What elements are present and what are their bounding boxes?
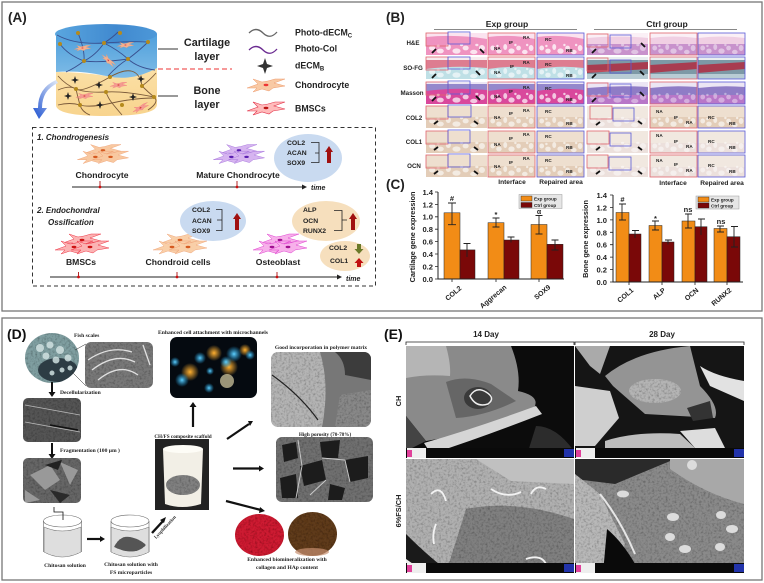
group headers: Exp group: [486, 19, 528, 29]
chart: bone gene expression: 1.0: [596, 216, 607, 225]
legend: C: [348, 34, 353, 40]
chart: cartilage gene expression: 1.4: [422, 188, 434, 197]
heading D: (D): [7, 326, 26, 342]
arrow heads: [248, 421, 265, 513]
column captions: [498, 179, 744, 187]
chart: cartilage gene expression: 0.8: [422, 225, 433, 234]
region labels: IF: [509, 40, 513, 45]
chart: bone gene expression: 0.6: [596, 241, 607, 250]
microparticle beaker: Chitosan solution with: [104, 562, 159, 568]
region labels: RB: [566, 145, 573, 150]
biomineralization photos: [235, 512, 337, 556]
tile borders: [426, 32, 745, 177]
scaffold label: CH/FS composite scaffold: [154, 434, 212, 440]
region labels: NA: [656, 158, 663, 163]
panel: bottom frame: [2, 318, 762, 580]
microparticle beaker: FS microparticles: [110, 570, 153, 576]
region labels: RB: [729, 145, 736, 150]
row labels: 6%FS/CH: [394, 495, 403, 527]
region labels: IF: [509, 111, 513, 116]
legend: BMSCs: [295, 104, 326, 114]
microparticle beaker: [104, 515, 159, 576]
porosity SEM: [276, 437, 373, 502]
region labels: RC: [545, 86, 552, 91]
column captions: Repaired area: [700, 180, 744, 187]
stain row labels: COL2: [406, 115, 423, 122]
region labels: RA: [523, 108, 530, 113]
SEM CH 14 day: [406, 346, 574, 458]
stain row labels: H&E: [406, 40, 420, 47]
region labels: RB: [566, 97, 573, 102]
fish scales photo: [25, 333, 80, 383]
region labels: RA: [523, 85, 530, 90]
cell attachment label: Enhanced cell attachment with microchannels: [158, 330, 269, 336]
chitosan beaker: [44, 507, 87, 569]
chart: bone gene expression: Bone gene expression: [581, 200, 590, 278]
chart: bone gene expression: 1.4: [596, 191, 608, 200]
chart: cartilage gene expression: #: [450, 194, 455, 203]
region labels: IF: [510, 64, 514, 69]
biomineralization label: collagen and HAp content: [256, 565, 318, 571]
endochondral ossification section: Chondroid cells: [146, 257, 211, 267]
region labels: RC: [545, 109, 552, 114]
chart: bone gene expression: Ctrl group: [711, 204, 733, 208]
region labels: NA: [494, 164, 501, 169]
chondrogenesis section: SOX9: [287, 160, 305, 167]
polymer matrix SEM: [271, 352, 371, 427]
chart: bone gene expression: ALP: [652, 287, 668, 302]
chart: bone gene expression: 0.8: [596, 228, 607, 237]
lyophilization arrow: Lyophilization: [154, 515, 178, 540]
chart: cartilage gene expression: 0.0: [422, 275, 433, 284]
region labels: RC: [708, 115, 715, 120]
region labels: IF: [674, 115, 678, 120]
chart: cartilage gene expression: Exp group: [534, 196, 557, 202]
legend: [247, 28, 353, 115]
panel B: histology: [386, 10, 745, 187]
legend: dECM: [295, 60, 320, 70]
column captions: Interface: [498, 179, 526, 186]
column captions: Interface: [659, 180, 687, 187]
scaffold photo: [155, 439, 209, 510]
SEM 6%FS/CH 28 day: [575, 459, 744, 573]
layer labels: [184, 37, 230, 111]
histology tiles: [426, 33, 745, 177]
region labels: NA: [494, 70, 501, 75]
chart: bone gene expression: Exp group: [711, 198, 734, 202]
chondrogenesis section: [37, 133, 342, 192]
chart: bone gene expression: [581, 191, 743, 308]
chart: cartilage gene expression: Cartilage gene expression: [408, 192, 417, 282]
stain row labels: SO-FG: [403, 65, 423, 72]
chart: bone gene expression: #: [620, 195, 625, 204]
endochondral ossification section: [36, 201, 370, 283]
endochondral ossification section: COL2: [329, 245, 347, 252]
chart: cartilage gene expression: SOX9: [533, 284, 552, 302]
region labels: IF: [674, 162, 678, 167]
region labels: NA: [494, 46, 501, 51]
region labels: RA: [523, 132, 530, 137]
heading B: (B): [386, 10, 405, 25]
decellularization step: [48, 382, 102, 397]
region labels: RC: [545, 37, 552, 42]
layer leader lines: [158, 49, 232, 96]
endochondral ossification section: COL2: [192, 207, 210, 214]
heading C: (C): [386, 177, 405, 192]
endochondral ossification section: Ossification: [48, 218, 94, 227]
stain row labels: [400, 40, 424, 170]
chart: cartilage gene expression: COL2: [444, 285, 463, 303]
region labels: RC: [708, 139, 715, 144]
connector lines: [72, 344, 86, 386]
arrow to microparticles: [87, 538, 101, 540]
porosity label: High porosity (70-78%): [299, 431, 351, 438]
column captions: Repaired area: [539, 179, 583, 186]
region labels: RA: [523, 156, 530, 161]
chart: cartilage gene expression: 0.4: [422, 250, 434, 259]
time labels: 28 Day: [649, 330, 675, 339]
region labels: IF: [509, 89, 513, 94]
brackets: [406, 342, 744, 345]
chart: cartilage gene expression: Aggrecan: [479, 284, 508, 310]
chart: cartilage gene expression: 0.2: [422, 262, 433, 271]
chart: bone gene expression: COL1: [616, 287, 635, 305]
region labels: RC: [708, 163, 715, 168]
legend: B: [320, 66, 325, 72]
region labels: RB: [566, 121, 573, 126]
heading A: (A): [8, 10, 27, 25]
stain row labels: Masson: [400, 90, 424, 97]
endochondral ossification section: COL1: [330, 258, 348, 265]
chondrogenesis section: Mature Chondrocyte: [196, 170, 280, 180]
overview tile arrows: [432, 43, 645, 174]
arrows from scaffold: [226, 424, 261, 510]
chart: bone gene expression: 1.2: [596, 203, 607, 212]
region labels: RC: [545, 158, 552, 163]
region labels: RA: [686, 144, 693, 149]
chart: bone gene expression: *: [654, 214, 657, 223]
region labels: IF: [509, 160, 513, 165]
region labels: NA: [656, 133, 663, 138]
chart: cartilage gene expression: 1.0: [422, 213, 433, 222]
arrow: zoom into layers: [33, 80, 58, 119]
stain row labels: COL1: [406, 139, 423, 146]
heading E: (E): [384, 326, 403, 342]
decellularized SEM: [23, 398, 81, 442]
region labels: NA: [656, 109, 663, 114]
region labels: RA: [523, 60, 530, 65]
chart: bone gene expression: ns: [684, 205, 692, 214]
chart: cartilage gene expression: 0.6: [422, 238, 433, 246]
endochondral ossification section: 2. Endochondral: [36, 206, 100, 215]
region labels: NA: [494, 142, 501, 147]
endochondral ossification section: OCN: [303, 218, 318, 225]
fragmentation step: [48, 443, 120, 459]
polymer matrix label: Good incorporation in polymer matrix: [275, 345, 367, 351]
panel: top frame: [2, 2, 762, 311]
region labels: RA: [686, 168, 693, 173]
chart: bone gene expression: 0.2: [596, 266, 607, 275]
region labels: RA: [523, 35, 530, 40]
SEM 6%FS/CH 14 day: [406, 459, 574, 573]
row labels: [394, 396, 403, 527]
chart: bone gene expression: ns: [717, 217, 725, 226]
time labels: [473, 330, 675, 339]
fragments SEM: [23, 458, 81, 503]
chart: bone gene expression: 0.0: [596, 278, 607, 287]
decellularization step: Decellularization: [60, 390, 102, 396]
region labels: [494, 35, 736, 174]
SEM CH 28 day: [575, 346, 744, 458]
legend: Chondrocyte: [295, 80, 349, 90]
region labels: IF: [509, 136, 513, 141]
chondrogenesis section: Chondrocyte: [76, 170, 129, 180]
region labels: NA: [494, 115, 501, 120]
chart: cartilage gene expression: *: [495, 210, 498, 219]
group headers: [486, 19, 688, 29]
chondrogenesis section: ACAN: [287, 150, 307, 157]
region labels: RC: [545, 62, 552, 67]
biomineralization label: Enhanced biomineralization with: [247, 557, 328, 563]
endochondral ossification section: SOX9: [192, 228, 210, 235]
chart: cartilage gene expression: Ctrl group: [534, 203, 556, 208]
layer labels: Bone: [194, 85, 220, 97]
cell attachment fluorescence: [170, 337, 257, 398]
layer labels: layer: [194, 99, 220, 111]
arrow up: [192, 407, 194, 427]
row labels: CH: [394, 396, 403, 406]
endochondral ossification section: ACAN: [192, 218, 212, 225]
layer labels: layer: [194, 51, 220, 63]
region labels: RB: [729, 121, 736, 126]
endochondral ossification section: time: [346, 276, 360, 283]
chart: bone gene expression: OCN: [684, 287, 700, 303]
endochondral ossification section: RUNX2: [303, 228, 326, 235]
chart: cartilage gene expression: 1.2: [422, 200, 433, 209]
region labels: RB: [729, 169, 736, 174]
endochondral ossification section: BMSCs: [66, 257, 96, 267]
legend: Photo-dECM: [295, 28, 348, 38]
layer labels: Cartilage: [184, 37, 230, 49]
group headers: Ctrl group: [646, 19, 688, 29]
chondrogenesis section: 1. Chondrogenesis: [37, 133, 110, 142]
dashed process box: [32, 128, 376, 286]
region labels: RC: [545, 134, 552, 139]
panel E: SEM grid: [384, 326, 744, 573]
fish scale SEM: [85, 342, 153, 388]
region labels: IF: [674, 139, 678, 144]
region labels: RB: [566, 48, 573, 53]
chondrogenesis section: COL2: [287, 140, 305, 147]
chondrogenesis section: time: [311, 185, 326, 192]
panel D: chitosan fish-scale scaffold: [7, 326, 373, 576]
bilayer cylinder: [55, 24, 157, 116]
chart: cartilage gene expression: [408, 188, 564, 310]
endochondral ossification section: ALP: [303, 207, 317, 214]
legend: Photo-Col: [295, 44, 337, 54]
chart: cartilage gene expression: α: [537, 209, 542, 216]
region labels: NA: [494, 94, 501, 99]
fragmentation step: Fragmentation (100 μm ): [60, 447, 120, 454]
fish scales label: Fish scales: [74, 333, 100, 339]
chart: bone gene expression: RUNX2: [711, 287, 733, 308]
chitosan beaker: Chitosan solution: [44, 563, 87, 569]
chart: bone gene expression: 0.4: [596, 253, 608, 262]
stain row labels: OCN: [407, 163, 421, 170]
endochondral ossification section: Osteoblast: [256, 257, 300, 267]
region labels: RB: [566, 73, 573, 78]
region labels: RB: [566, 169, 573, 174]
region labels: RA: [686, 120, 693, 125]
panel A: scaffold and differentiation schematic: [8, 10, 376, 286]
time labels: 14 Day: [473, 330, 499, 339]
